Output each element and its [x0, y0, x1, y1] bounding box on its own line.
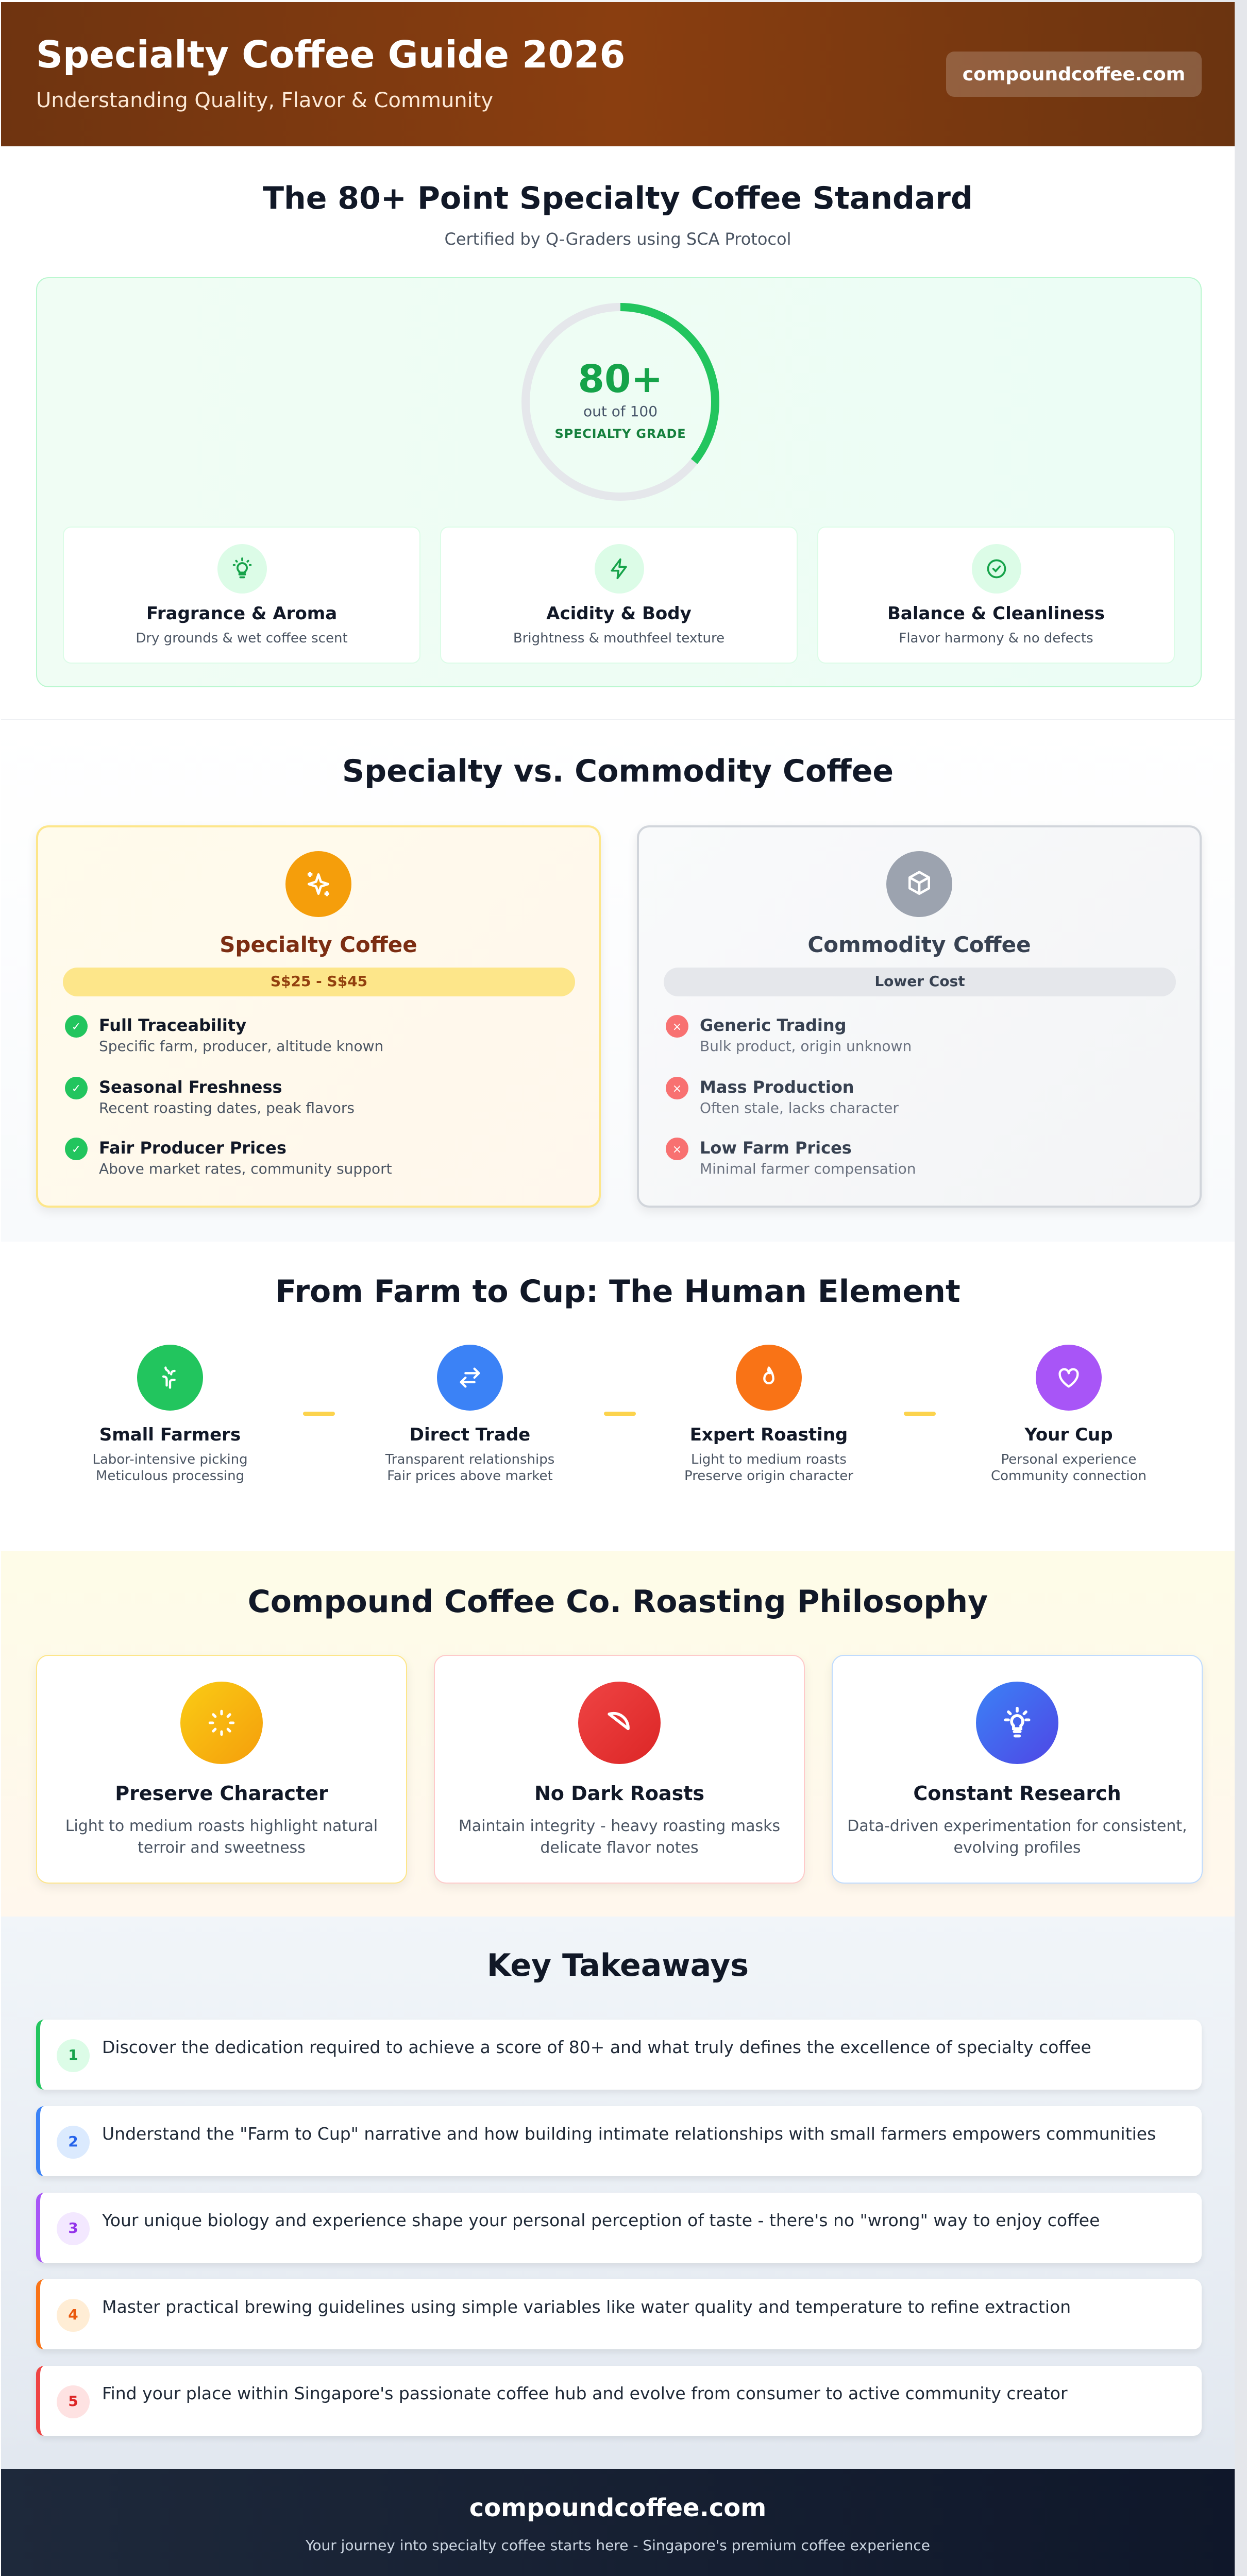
- footer site name: compoundcoffee.com: [469, 2494, 766, 2522]
- section: key takeaways: [1, 1917, 1235, 2469]
- icon: sparkle: [285, 851, 351, 917]
- section: 80+ standard: [1, 146, 1235, 720]
- takeaway 1: 1: [68, 2047, 78, 2064]
- list: specialty benefits: Above market rates, community support: [99, 1161, 392, 1178]
- list: specialty benefits: ✓: [72, 1142, 81, 1156]
- takeaway 1: Discover the dedication required to achieve a score of 80+ and what truly defines the excellence of specialty coffee: [102, 2038, 1091, 2057]
- card: acidity: Acidity & Body: [546, 604, 692, 624]
- card: fragrance: Fragrance & Aroma: [146, 604, 337, 624]
- score value: 80+: [578, 357, 663, 401]
- cost pill: [664, 968, 1176, 996]
- icon: ban: [578, 1682, 661, 1764]
- header subtitle: Understanding Quality, Flavor & Community: [36, 88, 493, 112]
- panel: score: [36, 277, 1202, 687]
- takeaway 3: 3: [68, 2221, 78, 2237]
- section title: Key Takeaways: [487, 1948, 749, 1984]
- card: balance: Balance & Cleanliness: [887, 604, 1105, 624]
- icon: bolt: [595, 544, 644, 594]
- score caption: out of 100: [583, 404, 658, 420]
- card: balance: Flavor harmony & no defects: [899, 631, 1093, 647]
- section title: Specialty vs. Commodity Coffee: [342, 754, 894, 790]
- cost pill: Lower Cost: [874, 974, 965, 990]
- section: roasting philosophy: [1, 1551, 1235, 1917]
- step: direct trade: Direct Trade: [410, 1425, 530, 1446]
- icon: sun: [180, 1682, 263, 1764]
- list: commodity drawbacks: Often stale, lacks character: [700, 1100, 899, 1117]
- card: no dark roasts: [434, 1655, 805, 1884]
- header title: Specialty Coffee Guide 2026: [36, 35, 626, 77]
- card: no dark roasts: Maintain integrity - heavy roasting masks: [459, 1817, 780, 1835]
- card: fragrance: Dry grounds & wet coffee scent: [136, 631, 348, 647]
- takeaway 1: [36, 2020, 1202, 2090]
- card: constant research: evolving profiles: [953, 1838, 1081, 1857]
- takeaway 3: Your unique biology and experience shape your personal perception of taste - there's no "wrong" way to enjoy coffee: [102, 2211, 1100, 2230]
- connector: [904, 1412, 936, 1416]
- list: commodity drawbacks: Minimal farmer compensation: [700, 1161, 916, 1178]
- list: specialty benefits: [65, 1015, 392, 1178]
- card: fragrance: [63, 527, 420, 664]
- panel: specialty: [36, 825, 601, 1208]
- takeaway 2: 2: [68, 2134, 78, 2150]
- card: no dark roasts: delicate flavor notes: [540, 1838, 699, 1857]
- list: commodity drawbacks: ×: [672, 1081, 682, 1095]
- takeaway 2: [36, 2106, 1202, 2176]
- step: your cup: Your Cup: [1024, 1425, 1113, 1446]
- footer: [1, 2469, 1235, 2576]
- step: small farmers: Meticulous processing: [96, 1469, 244, 1484]
- card: constant research: [832, 1655, 1203, 1884]
- step: your cup: Personal experience: [1001, 1452, 1136, 1468]
- icon: box: [886, 851, 952, 917]
- takeaway 4: 4: [68, 2307, 78, 2324]
- step: small farmers: Small Farmers: [99, 1425, 241, 1446]
- icon: check circle: [972, 544, 1021, 594]
- connector: [303, 1412, 335, 1416]
- card: no dark roasts: No Dark Roasts: [534, 1783, 704, 1805]
- takeaway 2: Understand the "Farm to Cup" narrative and how building intimate relationships with small farmers empowers communities: [102, 2124, 1156, 2144]
- connector: [604, 1412, 636, 1416]
- card: preserve character: [36, 1655, 407, 1884]
- card: preserve character: Light to medium roasts highlight natural: [65, 1817, 378, 1835]
- panel: specialty: Specialty Coffee: [220, 933, 417, 957]
- grade label: SPECIALTY GRADE: [555, 427, 686, 441]
- header: [1, 2, 1235, 146]
- takeaway 4: [36, 2279, 1202, 2349]
- list: commodity drawbacks: Generic Trading: [700, 1015, 847, 1035]
- card: preserve character: Preserve Character: [115, 1783, 328, 1805]
- card: constant research: Data-driven experimentation for consistent,: [847, 1817, 1187, 1835]
- card: acidity: Brightness & mouthfeel texture: [513, 631, 724, 647]
- list: specialty benefits: Seasonal Freshness: [99, 1077, 282, 1097]
- section: specialty vs commodity: [1, 720, 1235, 1242]
- list: commodity drawbacks: [666, 1015, 916, 1178]
- price pill: S$25 - S$45: [271, 974, 367, 990]
- icon: bulb: [217, 544, 267, 594]
- step: expert roasting: Light to medium roasts: [691, 1452, 847, 1468]
- list: specialty benefits: ✓: [72, 1020, 81, 1033]
- list: specialty benefits: Full Traceability: [99, 1015, 246, 1035]
- step: direct trade: [385, 1345, 554, 1484]
- list: commodity drawbacks: Low Farm Prices: [700, 1138, 852, 1158]
- panel: commodity: Commodity Coffee: [807, 933, 1031, 957]
- section title: From Farm to Cup: The Human Element: [275, 1274, 960, 1310]
- takeaway 5: Find your place within Singapore's passionate coffee hub and evolve from consumer to active community creator: [102, 2384, 1068, 2403]
- section title: The 80+ Point Specialty Coffee Standard: [263, 181, 973, 217]
- step: small farmers: Labor-intensive picking: [92, 1452, 248, 1468]
- list: specialty benefits: Fair Producer Prices: [99, 1138, 287, 1158]
- card: constant research: Constant Research: [913, 1783, 1121, 1805]
- list: commodity drawbacks: ×: [672, 1142, 682, 1156]
- price pill: [63, 968, 575, 996]
- icon: lightbulb: [976, 1682, 1058, 1764]
- takeaway 5: [36, 2366, 1202, 2436]
- list: specialty benefits: Specific farm, producer, altitude known: [99, 1039, 383, 1055]
- list: specialty benefits: Recent roasting dates, peak flavors: [99, 1100, 355, 1117]
- step: direct trade: Fair prices above market: [387, 1469, 553, 1484]
- step: your cup: [991, 1345, 1147, 1484]
- website badge: [946, 52, 1202, 97]
- section title: Compound Coffee Co. Roasting Philosophy: [248, 1584, 988, 1620]
- list: commodity drawbacks: ×: [672, 1020, 682, 1033]
- section subtitle: Certified by Q-Graders using SCA Protocol: [444, 229, 791, 249]
- takeaway 5: 5: [68, 2394, 78, 2410]
- card: balance: [817, 527, 1175, 664]
- card: preserve character: terroir and sweetness: [138, 1838, 306, 1857]
- step: your cup: Community connection: [991, 1469, 1147, 1484]
- takeaway 3: [36, 2193, 1202, 2263]
- website badge: compoundcoffee.com: [963, 63, 1185, 85]
- step: expert roasting: [684, 1345, 853, 1484]
- panel: commodity: [637, 825, 1202, 1208]
- takeaway 4: Master practical brewing guidelines using simple variables like water quality and temperature to refine extraction: [102, 2297, 1071, 2317]
- section: farm to cup: [1, 1242, 1235, 1552]
- list: specialty benefits: ✓: [72, 1081, 81, 1095]
- step: small farmers: [92, 1345, 248, 1484]
- list: commodity drawbacks: Bulk product, origin unknown: [700, 1039, 912, 1055]
- score gauge: [521, 303, 719, 501]
- step: expert roasting: Expert Roasting: [690, 1425, 848, 1446]
- step: expert roasting: Preserve origin character: [684, 1469, 853, 1484]
- footer tagline: Your journey into specialty coffee starts here - Singapore's premium coffee experience: [306, 2538, 930, 2554]
- list: commodity drawbacks: Mass Production: [700, 1077, 854, 1097]
- step: direct trade: Transparent relationships: [385, 1452, 554, 1468]
- card: acidity: [440, 527, 798, 664]
